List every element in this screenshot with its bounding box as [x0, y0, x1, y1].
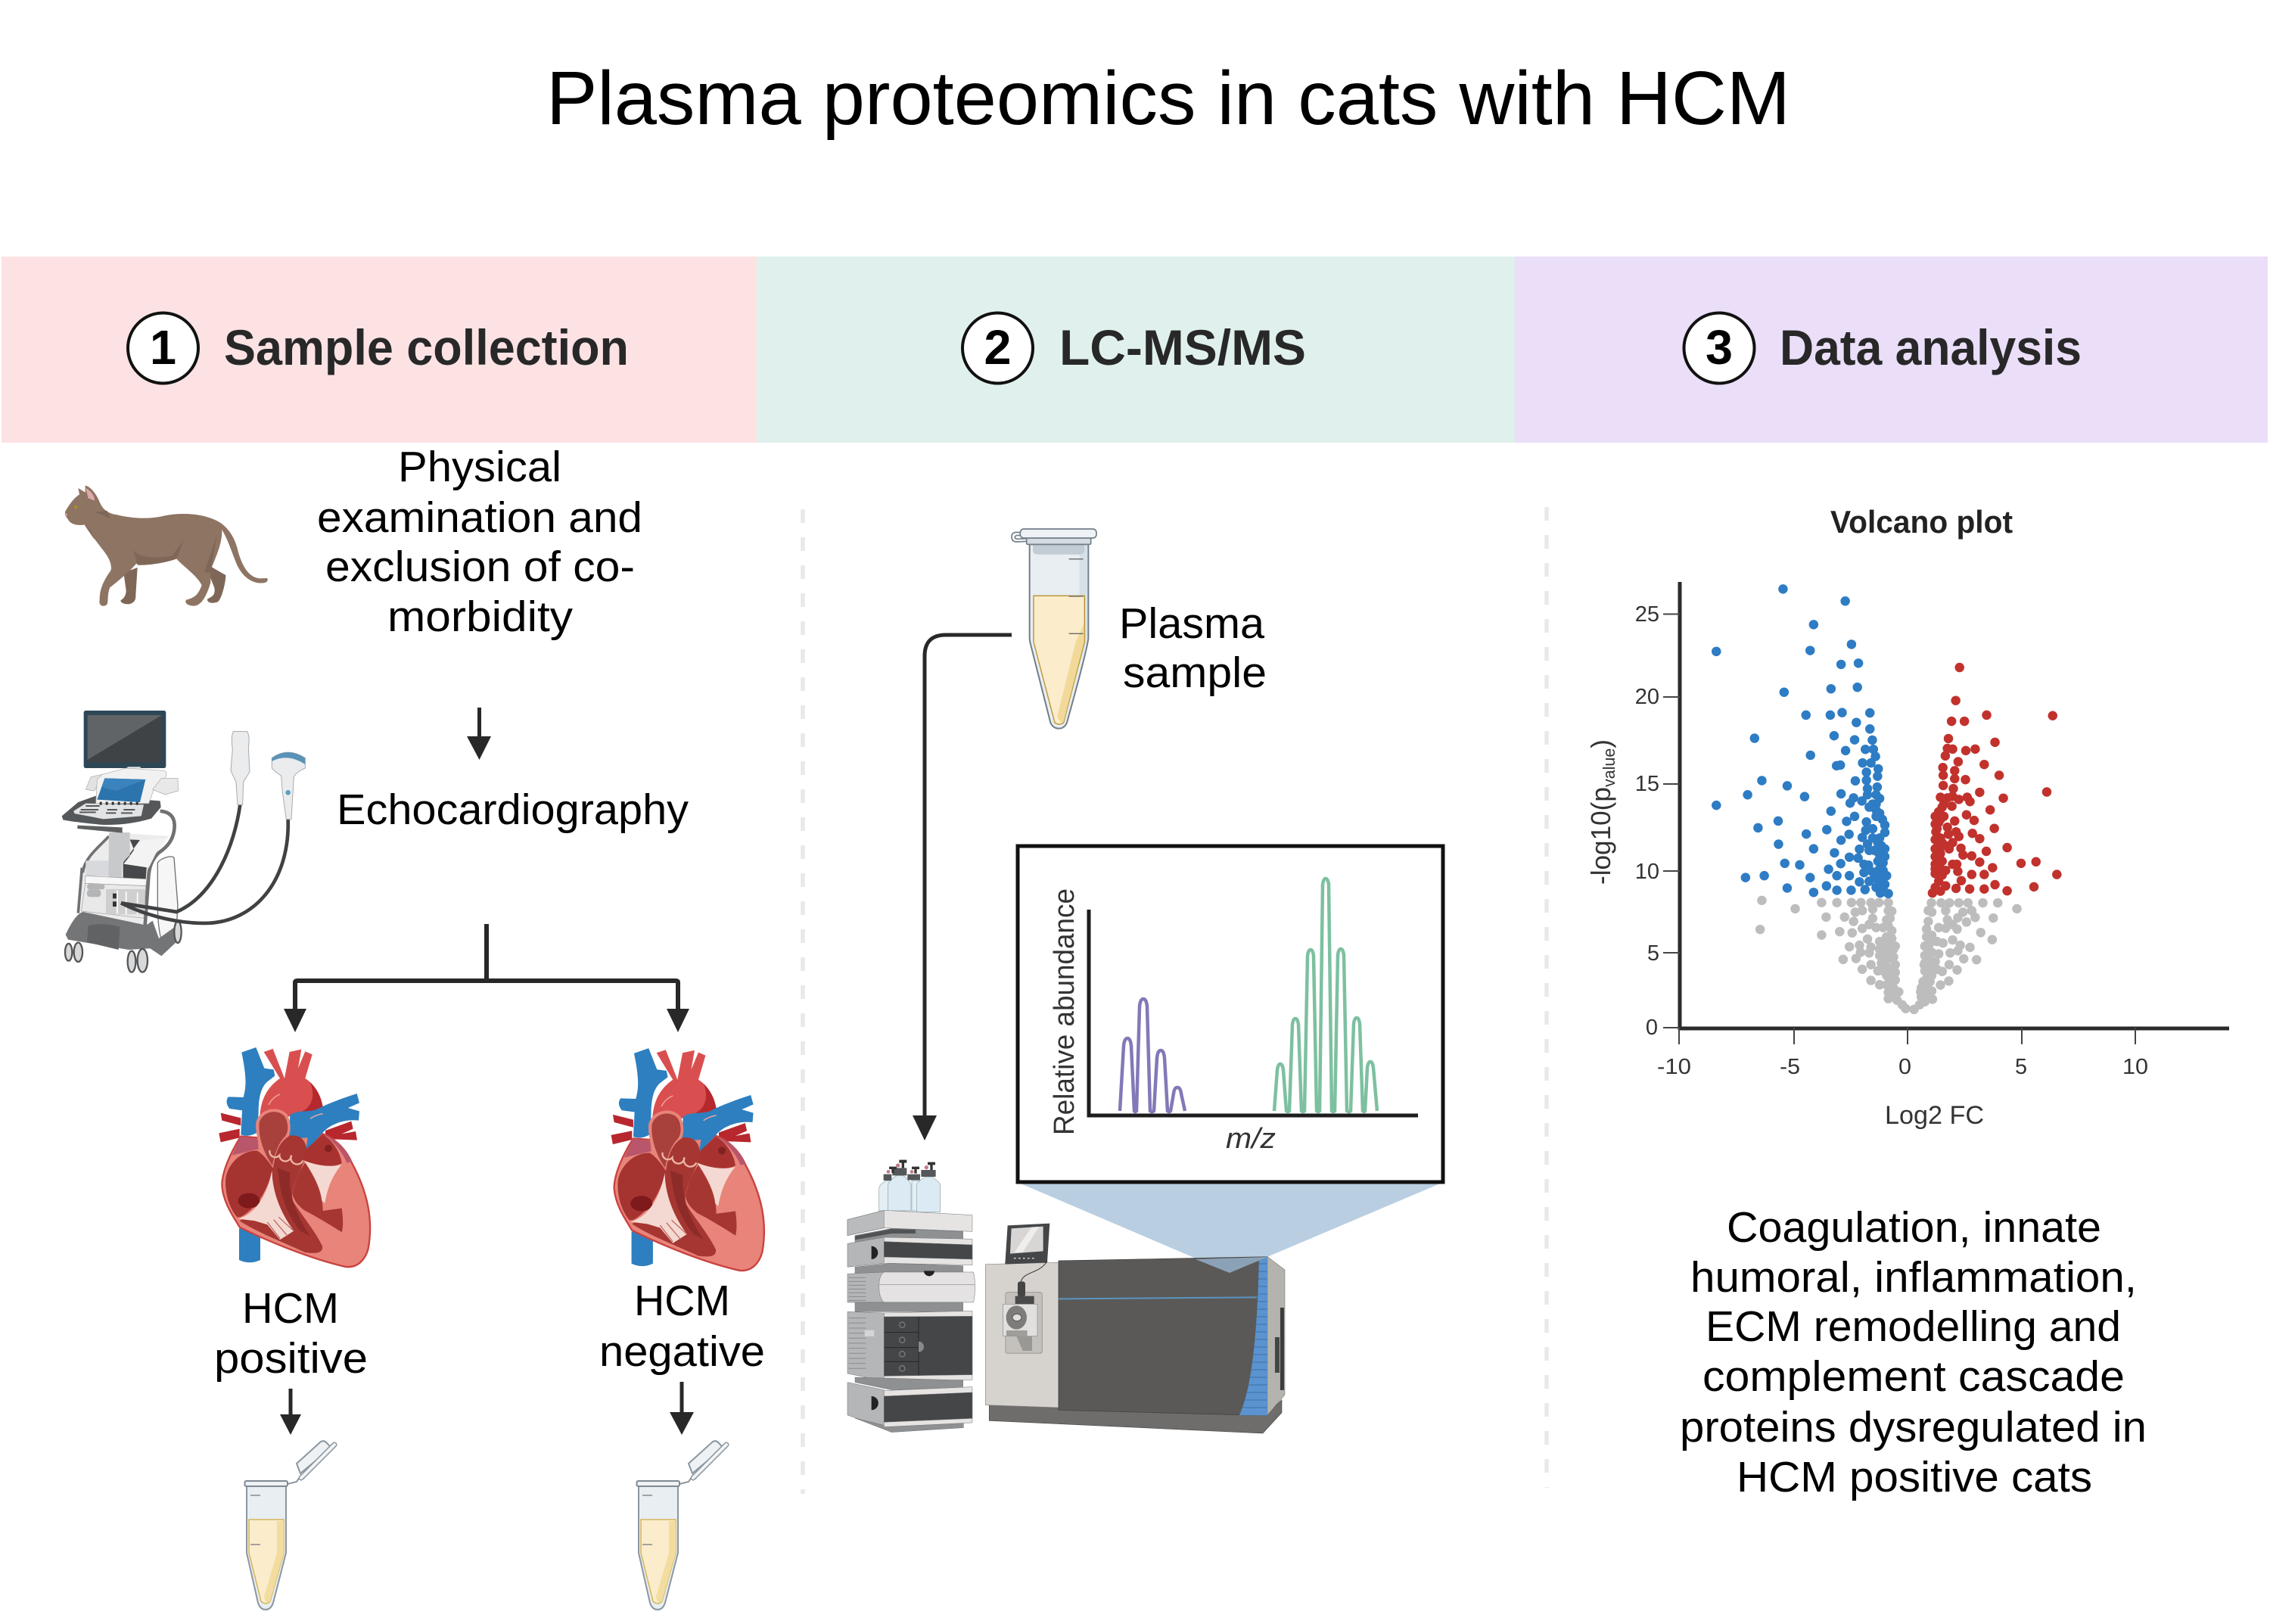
y tick labels: 15 — [1635, 772, 1659, 796]
text: HCM negative: negative — [599, 1327, 765, 1376]
icon: zoom cone overlap on instrument — [1196, 1257, 1267, 1273]
step number 1 — [128, 313, 198, 383]
data points: not significant — [1760, 901, 2017, 1010]
text: physical examination — [317, 443, 642, 641]
panel: mass spectrum inset — [1018, 846, 1443, 1182]
icon: liquid chromatography stack — [847, 1160, 975, 1433]
text: HCM positive: positive — [214, 1334, 368, 1383]
text: HCM positive: HCM — [242, 1284, 339, 1333]
text: findings summary: complement cascade — [1702, 1352, 2125, 1401]
text: HCM positive — [214, 1284, 368, 1383]
step number 3: 3 — [1706, 320, 1733, 375]
text: physical examination: examination and — [317, 493, 642, 542]
chart peaks: purple — [1120, 999, 1185, 1112]
text: plasma sample: sample — [1123, 649, 1267, 697]
text: findings summary: humoral, inflammation, — [1690, 1253, 2137, 1302]
data points: downregulated — [1716, 589, 1889, 894]
y axis label: -log10(p — [1585, 785, 1616, 885]
heading: data analysis: Data analysis — [1780, 319, 2082, 375]
chart: volcano plot — [1585, 504, 2229, 1130]
icon: ultrasound machine — [62, 711, 305, 972]
x tick labels: 0 — [1898, 1055, 1911, 1079]
icon: tube HCM negative — [637, 1441, 726, 1610]
step number 2: 2 — [984, 320, 1011, 375]
y axis label: ) — [1585, 739, 1616, 748]
y tick labels: 10 — [1635, 860, 1659, 884]
text: findings summary — [1680, 1203, 2147, 1501]
heading: LC-MS/MS: LC-MS/MS — [1059, 319, 1306, 375]
chart peaks: green — [1274, 879, 1377, 1112]
chart title: Volcano plot — [1830, 504, 2013, 540]
arrow: positive to tube — [280, 1389, 301, 1435]
y tick labels — [1635, 602, 1659, 1040]
arrow: negative to tube — [670, 1382, 694, 1435]
arrow: examination to echocardiography — [467, 708, 491, 760]
text: findings summary: Coagulation, innate — [1727, 1203, 2101, 1252]
title: Plasma proteomics in cats with HCM — [546, 56, 1790, 141]
icon: cat — [65, 486, 268, 606]
arrow: branch to HCM groups — [284, 924, 689, 1032]
header band: sample collection — [2, 257, 757, 443]
text: echocardiography: Echocardiography — [337, 786, 689, 834]
heading: sample collection: Sample collection — [224, 319, 629, 375]
text: findings summary: HCM positive cats — [1737, 1453, 2092, 1501]
x tick labels: 10 — [2122, 1055, 2148, 1079]
y tick labels: 25 — [1635, 602, 1659, 627]
chart axes — [1089, 910, 1418, 1115]
text: physical examination: exclusion of co- — [325, 543, 635, 591]
text: plasma sample — [1119, 599, 1267, 697]
header band: LC-MS/MS — [757, 257, 1515, 443]
x axis label: Log2 FC — [1885, 1101, 1984, 1130]
icon: tube HCM positive — [245, 1441, 334, 1610]
icon: plasma sample tube — [1012, 529, 1096, 729]
ultrasound trolley — [65, 811, 182, 972]
step number 1: 1 — [150, 320, 176, 375]
text: HCM negative: HCM — [634, 1277, 730, 1325]
icon: heart HCM negative — [611, 1048, 764, 1271]
x tick labels: 5 — [2015, 1055, 2027, 1079]
axis label: m/z: m/z — [1226, 1123, 1276, 1155]
text: findings summary: ECM remodelling and — [1706, 1302, 2121, 1351]
axis label: relative abundance: Relative abundance — [1049, 888, 1081, 1135]
y axis label: value — [1600, 748, 1619, 787]
icon: mass spectrometer — [985, 1224, 1285, 1433]
text: physical examination: morbidity — [387, 593, 574, 641]
ultrasound probes and cables — [121, 732, 305, 923]
icon: solvent bottles — [879, 1160, 941, 1212]
axes and ticks — [1663, 582, 2229, 1044]
header band: data analysis — [1515, 257, 2268, 443]
text: physical examination: Physical — [398, 443, 561, 491]
step number 2 — [962, 313, 1033, 383]
text: HCM negative — [599, 1277, 765, 1376]
text: findings summary: proteins dysregulated in — [1680, 1403, 2147, 1451]
text: plasma sample: Plasma — [1119, 599, 1264, 648]
arrow: plasma sample to LC-MS — [913, 635, 1012, 1140]
y tick labels: 5 — [1647, 941, 1659, 966]
y tick labels: 0 — [1646, 1016, 1658, 1040]
x tick labels — [1657, 1055, 2148, 1079]
icon: zoom cone from mass spectrometer — [1017, 1182, 1444, 1273]
ultrasound console — [62, 768, 179, 833]
x tick labels: -10 — [1657, 1055, 1691, 1079]
icon: heart HCM positive — [219, 1047, 370, 1267]
data points: upregulated — [1933, 667, 2057, 893]
step number 3 — [1684, 313, 1754, 383]
y tick labels: 20 — [1635, 685, 1659, 709]
x tick labels: -5 — [1780, 1055, 1800, 1079]
